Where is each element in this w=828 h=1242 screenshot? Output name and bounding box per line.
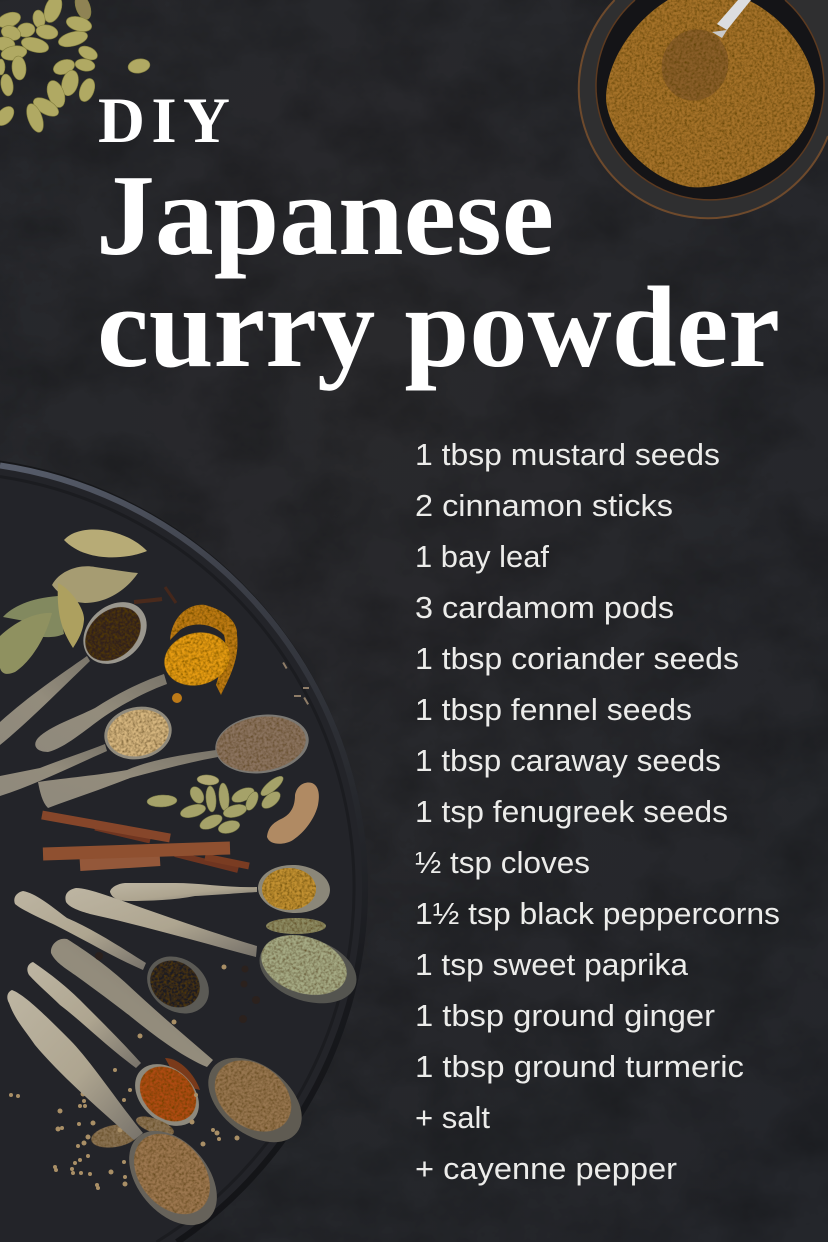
spoon: fennel seeds: [65, 888, 365, 1015]
ingredients list: 2 cinnamon sticks: [415, 489, 673, 523]
loose peppercorns: [95, 952, 260, 1023]
title line: DIY: DIY: [98, 85, 230, 157]
bowl of curry powder, top right: [579, 0, 828, 218]
fennel and caraway crumbs: [266, 662, 326, 934]
title line: Japanese: Japanese: [96, 152, 554, 279]
spoon: turmeric: [35, 605, 237, 752]
spoon: fenugreek: [110, 863, 331, 915]
ingredients list: [415, 438, 780, 1186]
spoon: sweet paprika: [27, 962, 211, 1138]
spoon in powder: [652, 0, 751, 110]
ingredients list: 1 tbsp ground turmeric: [415, 1050, 744, 1084]
spoon: cloves: [0, 587, 176, 745]
spoon: caraway seeds: [38, 709, 313, 808]
ingredients list: 1 tbsp caraway seeds: [415, 744, 721, 778]
title: [96, 85, 780, 391]
ingredients list: 1 bay leaf: [415, 540, 550, 574]
ingredients list: + cayenne pepper: [415, 1152, 677, 1186]
ingredients list: + salt: [415, 1101, 491, 1135]
cardamom pods on tray: [147, 773, 286, 836]
ingredients list: 1 tbsp mustard seeds: [415, 438, 720, 472]
ginger root: [267, 782, 319, 844]
bay leaves: [0, 529, 147, 674]
cardamom pods, top left: [0, 0, 151, 134]
ingredients list: 1½ tsp black peppercorns: [415, 897, 780, 931]
curry powder: [606, 0, 815, 187]
title line: curry powder: curry powder: [97, 264, 780, 391]
cinnamon sticks: [42, 815, 249, 870]
ingredients list: ½ tsp cloves: [415, 846, 590, 880]
round dark tray: [0, 460, 368, 1242]
ingredients list: 1 tbsp ground ginger: [415, 999, 715, 1033]
spoon: mustard seeds: [7, 990, 235, 1242]
ingredients list: 1 tbsp fennel seeds: [415, 693, 692, 727]
spoon: ground ginger: [0, 700, 177, 796]
ingredients list: 1 tsp fenugreek seeds: [415, 795, 728, 829]
scattered mustard seeds: [9, 964, 240, 1190]
spoon: black peppercorns: [14, 891, 220, 1025]
ingredients list: 1 tbsp coriander seeds: [415, 642, 739, 676]
ingredients list: 1 tsp sweet paprika: [415, 948, 688, 982]
spoon: coriander seeds: [51, 939, 318, 1159]
ingredients list: 3 cardamom pods: [415, 591, 674, 625]
